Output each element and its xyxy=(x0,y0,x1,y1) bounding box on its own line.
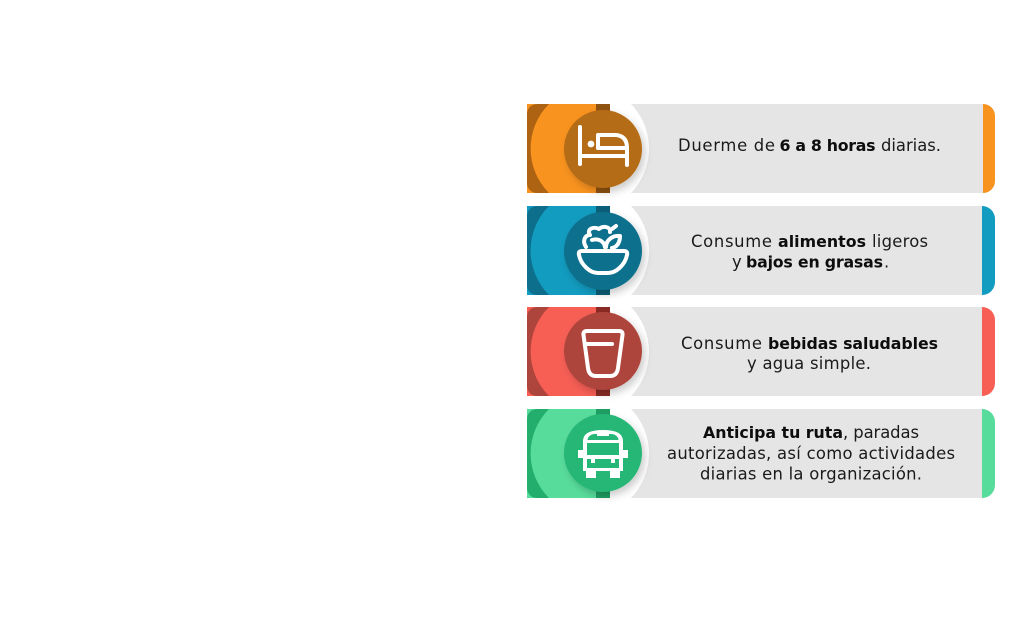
left colored tab xyxy=(527,206,649,295)
card background xyxy=(610,307,995,396)
text xyxy=(691,232,928,251)
text: diarias en la organización. xyxy=(700,464,922,484)
card background xyxy=(610,206,995,295)
panel: route xyxy=(527,409,995,500)
text: ligeros xyxy=(872,232,928,251)
icon: bus xyxy=(578,430,628,478)
icon circle xyxy=(564,414,642,492)
right accent cap xyxy=(982,206,995,295)
text: 6 a 8 horas xyxy=(780,136,876,155)
left colored tab xyxy=(527,307,649,396)
text xyxy=(678,136,941,155)
right accent cap xyxy=(983,104,995,193)
text: Anticipa tu ruta xyxy=(703,423,843,442)
right accent cap xyxy=(982,307,995,396)
text: y xyxy=(732,252,742,272)
text: . xyxy=(884,252,889,272)
panel: drinks xyxy=(527,307,995,398)
card background xyxy=(610,104,995,193)
right accent cap xyxy=(982,409,995,498)
left colored tab xyxy=(527,104,649,193)
panel: food xyxy=(527,206,995,298)
card background xyxy=(610,409,995,498)
text xyxy=(703,423,919,442)
text: alimentos xyxy=(778,232,866,251)
text: autorizadas, así como actividades xyxy=(667,444,955,463)
icon circle xyxy=(564,110,642,188)
icon circle xyxy=(564,312,642,390)
left colored tab xyxy=(527,409,649,498)
text: bajos en grasas xyxy=(746,252,883,272)
icon circle xyxy=(564,212,642,290)
text: Consume xyxy=(691,232,772,251)
icon: glass of water xyxy=(583,331,623,376)
text: y agua simple. xyxy=(747,354,871,373)
text: Consume xyxy=(681,334,762,353)
text: bebidas saludables xyxy=(768,334,938,353)
text: diarias. xyxy=(881,136,941,155)
icon: salad bowl xyxy=(579,226,627,273)
text: , paradas xyxy=(843,423,919,442)
icon: bed xyxy=(580,127,627,165)
panel: sleep xyxy=(527,104,995,196)
text xyxy=(681,334,938,353)
text: Duerme de xyxy=(678,136,775,155)
